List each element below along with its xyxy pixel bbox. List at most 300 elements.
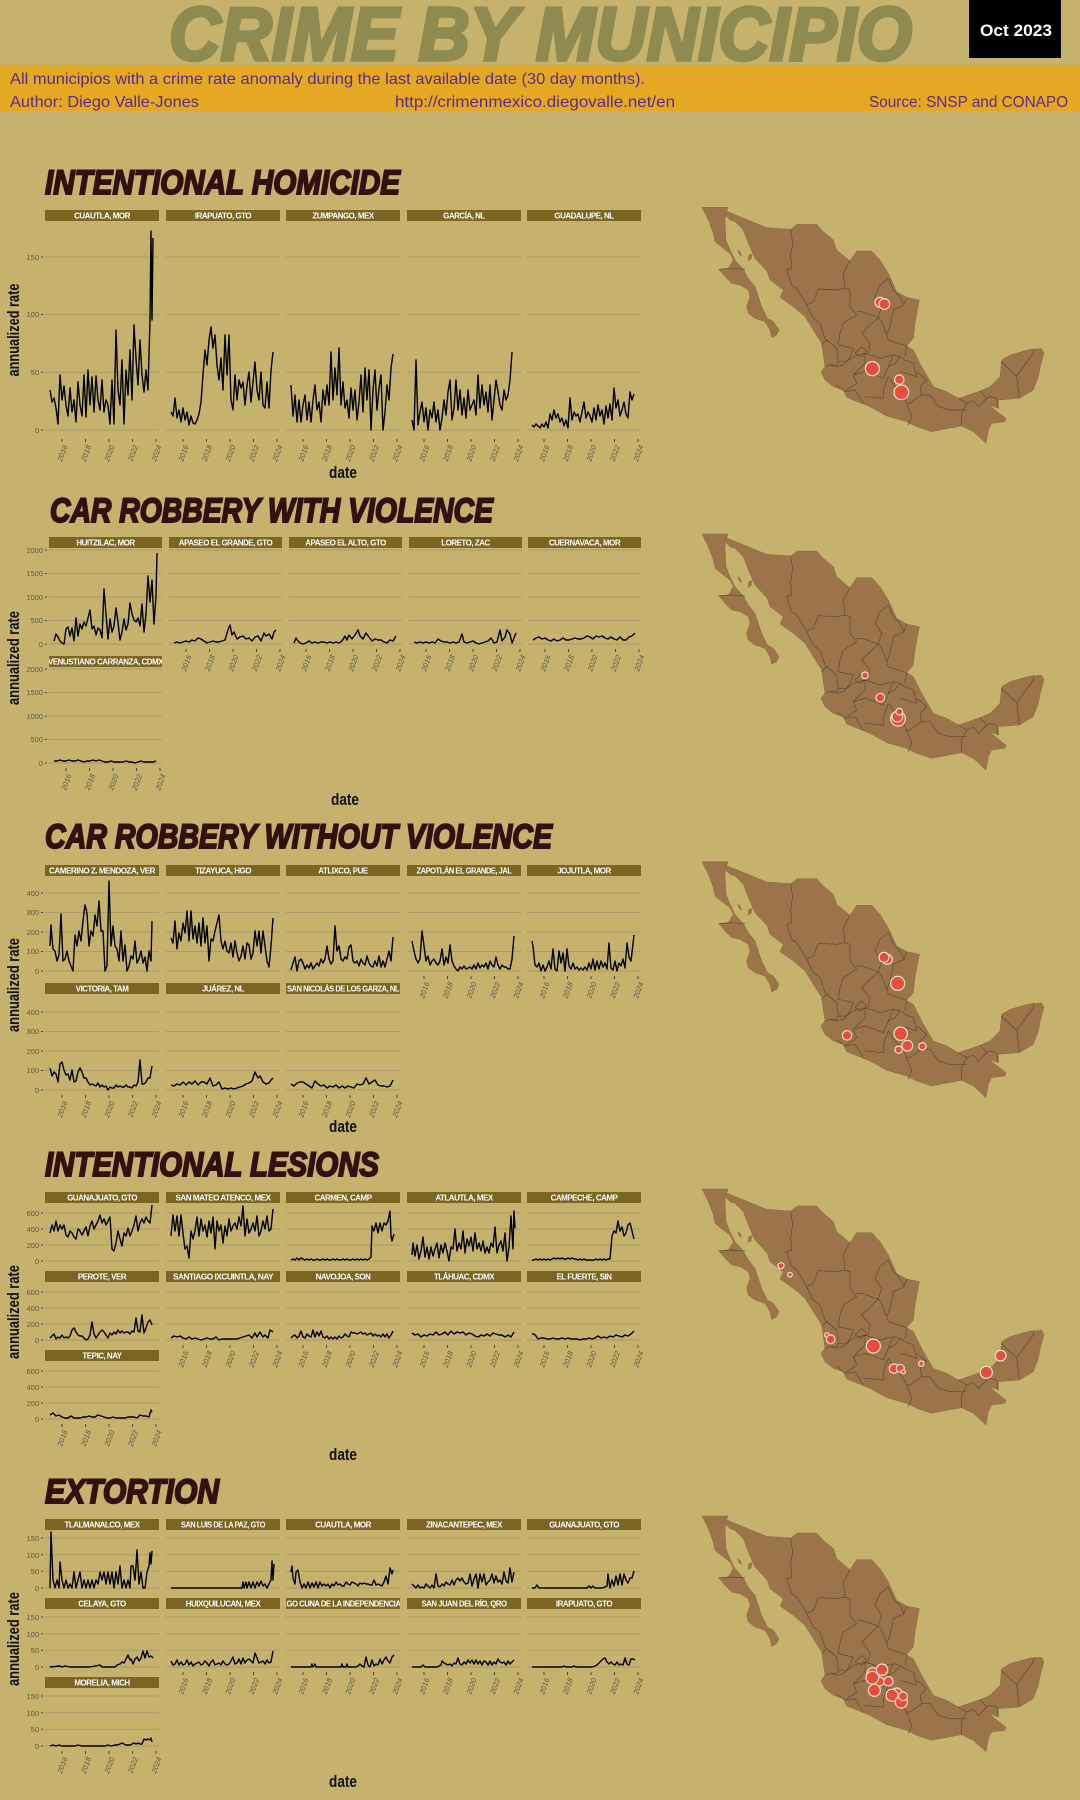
y axis: 200 [26,1241,39,1250]
x axis: 2016 [417,980,432,1000]
strip label: GUADALUPE, NL [554,212,614,220]
x axis: 2018 [79,1428,93,1448]
x axis: 2024 [273,654,288,673]
x axis: 2024 [390,1677,405,1696]
panel: Tlalmanalco [26,1519,159,1593]
strip label: SANTIAGO IXCUINTLA, NAY [173,1272,274,1282]
x axis: 2020 [464,443,479,463]
x axis: 2022 [367,1676,381,1696]
line [532,1221,634,1260]
map: car robbery with violence [702,534,1044,770]
panel: Perote [26,1271,159,1345]
map: intentional lesions [702,1189,1044,1425]
panel: Santiago Ixcuintla [166,1271,285,1369]
line [174,625,276,643]
x axis: 2022 [367,443,381,463]
line [294,630,396,644]
x axis [417,1672,526,1696]
x axis: 2020 [102,443,117,463]
y axis: 150 [26,1692,39,1701]
section: intentional lesions [4,1146,1044,1464]
x axis: 2016 [537,1349,552,1369]
y axis: 400 [26,1008,39,1017]
x axis: 2016 [55,1755,70,1775]
y axis: 200 [26,1320,39,1329]
line [50,1060,152,1090]
x axis: 2020 [584,1676,599,1696]
x axis: 2018 [441,443,455,463]
x axis: 2022 [250,653,264,673]
x axis: 2016 [296,1349,311,1369]
strip label: EL FUERTE, SIN [556,1272,612,1282]
x axis: 2016 [537,1676,552,1696]
line [291,1078,393,1088]
panel: Huixquilucan [166,1598,285,1696]
x axis: 2018 [441,1676,455,1696]
x axis [417,1345,526,1369]
y axis: 0 [39,640,43,649]
x axis: 2022 [488,1349,502,1369]
strip label: TIZAYUCA, HGO [195,866,251,876]
panel: Loreto [409,537,528,673]
panel: Guanajuato [527,1519,641,1588]
strip label: TLÁHUAC, CDMX [434,1272,495,1282]
x axis [537,976,646,1000]
strip label: CAMPECHE, CAMP [551,1194,619,1202]
line [291,926,393,971]
x axis [179,649,288,673]
x axis: 2024 [149,444,164,463]
line [54,553,157,644]
strip label: HUITZILAC, MOR [76,538,135,548]
y axis: 100 [26,1630,39,1639]
x axis: 2024 [393,654,408,673]
line [532,935,634,971]
anomaly dots [778,1263,1006,1378]
x axis: 2020 [102,1755,117,1775]
y axis title: annualized rate [4,284,23,376]
x axis: 2018 [200,1099,214,1119]
x axis: 2020 [343,1676,358,1696]
x axis: 2020 [584,443,599,463]
y axis: 1000 [26,593,43,602]
panel: Camerino Z. Mendoza [26,865,159,976]
y axis: 400 [26,1304,39,1313]
strip label: ATLAUTLA, MEX [435,1194,494,1202]
x axis: 2020 [343,1099,358,1119]
x axis: 2020 [464,1676,479,1696]
strip label: GARCÍA, NL [443,212,485,220]
x axis: 2018 [200,443,214,463]
x axis: 2016 [417,1676,432,1696]
x axis title: date [329,1772,357,1791]
x axis: 2018 [320,443,334,463]
x axis: 2018 [323,653,337,673]
x axis: 2018 [79,1755,93,1775]
y axis [26,1692,43,1751]
y axis: 150 [26,253,39,262]
panel: Guadalupe [527,210,646,463]
x axis: 2022 [247,1099,261,1119]
x axis: 2022 [608,1349,622,1369]
panel: Atlautla [407,1192,521,1261]
strip label: APASEO EL ALTO, GTO [305,538,386,548]
x axis: 2024 [513,654,528,673]
panel: San Juan del Río [407,1598,526,1696]
x axis: 2024 [270,1677,285,1696]
panel: Morelia [26,1677,164,1775]
panel: El Fuerte [527,1271,646,1369]
date badge: Oct 2023 [980,21,1052,40]
x axis: 2018 [562,653,576,673]
x axis: 2018 [79,443,93,463]
x axis: 2024 [632,654,647,673]
x axis: 2022 [126,443,140,463]
y axis: 600 [26,1209,39,1218]
y axis: 100 [26,947,39,956]
x axis: 2022 [126,1755,140,1775]
panel: García [407,210,526,463]
x axis: 2020 [226,653,241,673]
map: extortion [702,1516,1044,1752]
y axis: 50 [31,1646,39,1655]
x axis: 2020 [464,1349,479,1369]
panel: Irapuato [527,1598,646,1696]
line [50,1410,152,1418]
strip label: NAVOJOA, SON [316,1272,371,1282]
x axis: 2016 [537,443,552,463]
line [412,931,514,971]
header band [0,65,1080,111]
section: intentional homicide [4,164,1044,482]
strip label: TEPIC, NAY [82,1352,123,1360]
x axis: 2016 [299,653,314,673]
y axis: 100 [26,1551,39,1560]
y axis [26,546,47,649]
x axis: 2024 [390,1100,405,1119]
line [532,1331,634,1340]
x axis: 2018 [320,1099,334,1119]
x axis: 2024 [511,444,526,463]
line [50,881,152,971]
y axis [26,1534,43,1593]
y axis title: annualized rate [4,938,23,1032]
panel: Huitzilac [26,537,162,649]
panel: Cuautla [26,210,164,463]
strip label: LORETO, ZAC [441,538,491,548]
x axis [537,439,646,463]
x axis: 2018 [561,1349,575,1369]
x axis: 2024 [511,981,526,1000]
strip label: CARMEN, CAMP [314,1194,373,1202]
x axis: 2016 [417,1349,432,1369]
y axis [26,665,47,768]
panel: Guanajuato [26,1192,159,1266]
x axis: 2016 [59,772,74,792]
y axis: 200 [26,1399,39,1408]
strip label: VENUSTIANO CARRANZA, CDMX [48,658,164,666]
x axis: 2024 [631,981,646,1000]
strip label [527,210,641,221]
map: intentional homicide [702,207,1044,443]
strip label: CAMERINO Z. MENDOZA, VER [49,866,156,876]
x axis [55,439,164,463]
x axis: 2018 [561,1676,575,1696]
strip label: CUERNAVACA, MOR [549,538,621,548]
section: extortion [4,1473,1044,1791]
y axis [26,1209,43,1266]
panel: Celaya [26,1598,159,1672]
strip label: MORELIA, MICH [74,1678,130,1688]
strip label [166,210,280,221]
strip label: SAN LUIS DE LA PAZ, GTO [181,1520,265,1530]
x axis: 2018 [441,980,455,1000]
y axis: 2000 [26,546,43,555]
x axis: 2022 [488,980,502,1000]
panel: San Luis de la Paz [166,1519,280,1588]
y axis: 1500 [26,569,43,578]
x axis: 2024 [270,444,285,463]
panel: San Nicolás de los Garza [286,983,405,1119]
panel: Tláhuac [407,1271,526,1369]
y axis: 2000 [26,665,43,674]
panel: Irapuato [166,210,285,463]
line [412,1658,514,1667]
header band: http://crimenmexico.diegovalle.net/en [395,94,675,111]
line [171,1330,273,1340]
x axis: 2022 [126,1099,140,1119]
x axis: 2022 [608,980,622,1000]
line [412,1331,514,1337]
line [532,388,634,428]
x axis title: date [329,463,357,482]
y axis: 0 [35,1742,39,1751]
x axis: 2022 [488,1676,502,1696]
panel: Apaseo el Alto [289,537,408,673]
x axis: 2022 [130,772,144,792]
x axis: 2022 [370,653,384,673]
y axis: 0 [39,759,43,768]
strip label: JOJUTLA, MOR [557,866,612,876]
strip label [286,210,400,221]
panel: Cuautla [286,1519,400,1588]
x axis [417,976,526,1000]
x axis: 2020 [466,653,481,673]
x axis: 2024 [511,1350,526,1369]
y axis: 0 [35,1336,39,1345]
panel: Zapotlán el Grande [407,865,526,1000]
x axis: 2022 [490,653,504,673]
y axis title: annualized rate [4,1265,23,1359]
y axis: 0 [35,967,39,976]
x axis [176,1345,285,1369]
x axis [55,1424,164,1448]
x axis: 2022 [247,1349,261,1369]
x axis [55,1751,164,1775]
strip label: CELAYA, GTO [78,1600,126,1608]
panel: Cuernavaca [528,537,647,673]
x axis: 2018 [443,653,457,673]
y axis: 0 [35,1663,39,1672]
y axis: 500 [30,735,43,744]
y axis [26,1288,43,1345]
strip label: APASEO EL GRANDE, GTO [179,538,273,548]
heading: INTENTIONAL HOMICIDE [45,164,401,202]
x axis: 2020 [584,1349,599,1369]
y axis: 0 [35,1415,39,1424]
x axis: 2018 [203,653,217,673]
x axis: 2020 [346,653,361,673]
heading: CAR ROBBERY WITH VIOLENCE [50,492,494,530]
x axis [537,1345,646,1369]
x axis: 2024 [631,444,646,463]
panel: Tizayuca [166,865,280,971]
y axis: 1500 [26,688,43,697]
x axis: 2018 [200,1349,214,1369]
strip label [407,210,521,221]
x axis [176,1672,285,1696]
anomaly dots [862,672,905,726]
y axis: 400 [26,1383,39,1392]
x axis title: date [331,790,359,809]
x axis: 2024 [270,1100,285,1119]
x axis: 2020 [343,443,358,463]
y axis: 300 [26,908,39,917]
line [50,1738,152,1746]
x axis: 2018 [320,1676,334,1696]
x axis: 2020 [343,1349,358,1369]
x axis [299,649,408,673]
y axis: 0 [35,1257,39,1266]
y axis: 200 [26,928,39,937]
x axis: 2016 [176,443,191,463]
anomaly dots [866,1664,907,1708]
y axis: 50 [31,368,39,377]
line [171,1651,273,1666]
line [50,1651,153,1667]
y axis: 0 [35,1584,39,1593]
panel: Navojoa [286,1271,405,1369]
y axis title: annualized rate [4,1592,23,1686]
panel: Dolores Hidalgo [229,1598,457,1696]
section: car robbery without violence [4,818,1044,1136]
x axis: 2024 [631,1677,646,1696]
x axis: 2024 [149,1756,164,1775]
y axis: 100 [26,1709,39,1718]
x axis: 2020 [585,653,600,673]
section: car robbery with violence [4,492,1044,809]
line [50,1315,152,1340]
y axis: 150 [26,1534,39,1543]
y axis: 300 [26,1027,39,1036]
header band: Author: Diego Valle-Jones [10,94,199,111]
x axis [296,1095,405,1119]
x axis [417,439,526,463]
panel: San Mateo Atenco [166,1192,280,1261]
y axis: 600 [26,1367,39,1376]
line [171,1206,273,1258]
line [50,231,153,424]
strip label: ZINACANTEPEC, MEX [426,1520,503,1530]
y axis: 0 [35,1086,39,1095]
heading: INTENTIONAL LESIONS [45,1146,379,1184]
y axis [26,1613,43,1672]
heading: CAR ROBBERY WITHOUT VIOLENCE [45,818,553,856]
x axis: 2016 [176,1676,191,1696]
x axis: 2020 [102,1428,117,1448]
x axis [296,1672,405,1696]
x axis: 2016 [176,1099,191,1119]
y axis: 150 [26,1613,39,1622]
y axis: 400 [26,1225,39,1234]
strip label: GUANAJUATO, GTO [549,1520,619,1530]
line [50,1532,152,1588]
strip label: GUANAJUATO, GTO [67,1194,137,1202]
y axis: 1000 [26,712,43,721]
panel: Victoria [26,983,164,1119]
x axis: 2022 [608,1676,622,1696]
x axis: 2016 [537,980,552,1000]
y axis: 0 [35,426,39,435]
x axis: 2018 [441,1349,455,1369]
strip label: SAN MATEO ATENCO, MEX [176,1194,272,1202]
y axis: 100 [26,1066,39,1075]
anomaly dots [865,297,909,400]
x axis: 2024 [511,1677,526,1696]
map: car robbery without violence [702,862,1044,1098]
y axis: 50 [31,1725,39,1734]
x axis: 2022 [247,1676,261,1696]
x axis: 2022 [488,443,502,463]
x axis: 2018 [200,1676,214,1696]
x axis: 2016 [538,653,553,673]
x axis: 2020 [106,772,121,792]
panel: Juárez [166,983,285,1119]
line [54,760,156,763]
strip label: HUIXQUILUCAN, MEX [186,1600,261,1608]
x axis title: date [329,1445,357,1464]
x axis [537,1672,646,1696]
line [171,327,273,425]
strip label [45,210,159,221]
strip label: IRAPUATO, GTO [556,1600,612,1608]
x axis: 2020 [223,1099,238,1119]
header band: Source: SNSP and CONAPO [869,94,1068,111]
x axis title: date [329,1117,357,1136]
x axis [296,1345,405,1369]
x axis: 2016 [176,1349,191,1369]
x axis [176,1095,285,1119]
panel: Venustiano Carranza [26,656,168,792]
y axis: 100 [26,310,39,319]
x axis: 2020 [102,1099,117,1119]
x axis: 2016 [179,653,194,673]
x axis: 2016 [296,1676,311,1696]
x axis: 2018 [561,980,575,1000]
line [532,1658,635,1667]
line [291,1211,394,1260]
strip label: CUAUTLA, MOR [74,212,131,220]
y axis: 500 [30,616,43,625]
panel: Atlixco [286,865,400,971]
x axis: 2024 [270,1350,285,1369]
line [412,1211,515,1261]
x axis [59,768,168,792]
y axis title: annualized rate [4,611,23,705]
x axis: 2024 [149,1429,164,1448]
x axis: 2020 [223,1676,238,1696]
y axis: 600 [26,1288,39,1297]
